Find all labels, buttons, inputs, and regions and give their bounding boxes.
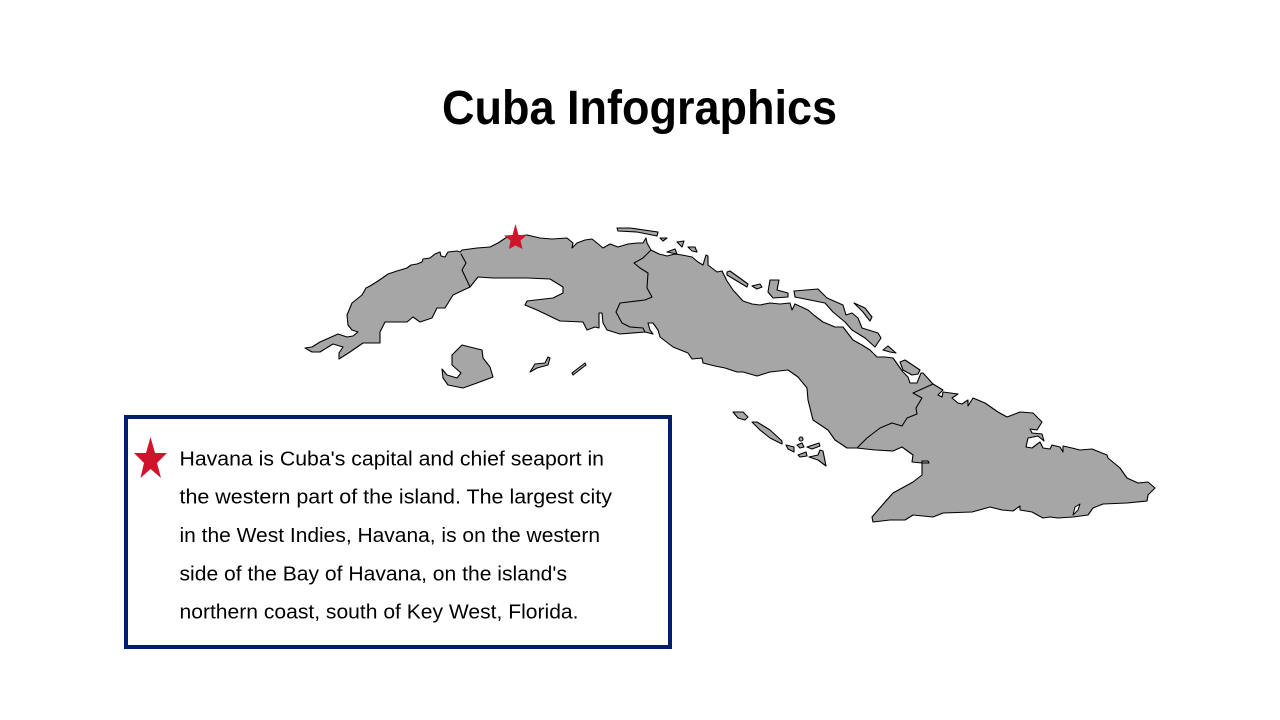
province borders [461,250,933,448]
title: Cuba Infographics [442,82,837,135]
description text [180,448,612,624]
map: Cuba [305,228,1155,522]
description text: Havana is Cuba's capital and chief seaport in [180,448,604,470]
main island [305,235,1155,522]
description text: side of the Bay of Havana, on the island's [180,564,567,586]
isla de la juventud [442,345,493,388]
callout box [126,417,670,647]
map star: Havana [504,224,527,249]
southern keys [530,357,929,466]
northern keys [617,228,920,375]
description text: the western part of the island. The largest city [180,486,612,508]
description text: northern coast, south of Key West, Florida. [180,602,578,624]
southeast lagoon [1073,504,1080,515]
description text: in the West Indies, Havana, is on the western [180,525,600,547]
icon: star [134,437,167,478]
box border [126,417,670,647]
